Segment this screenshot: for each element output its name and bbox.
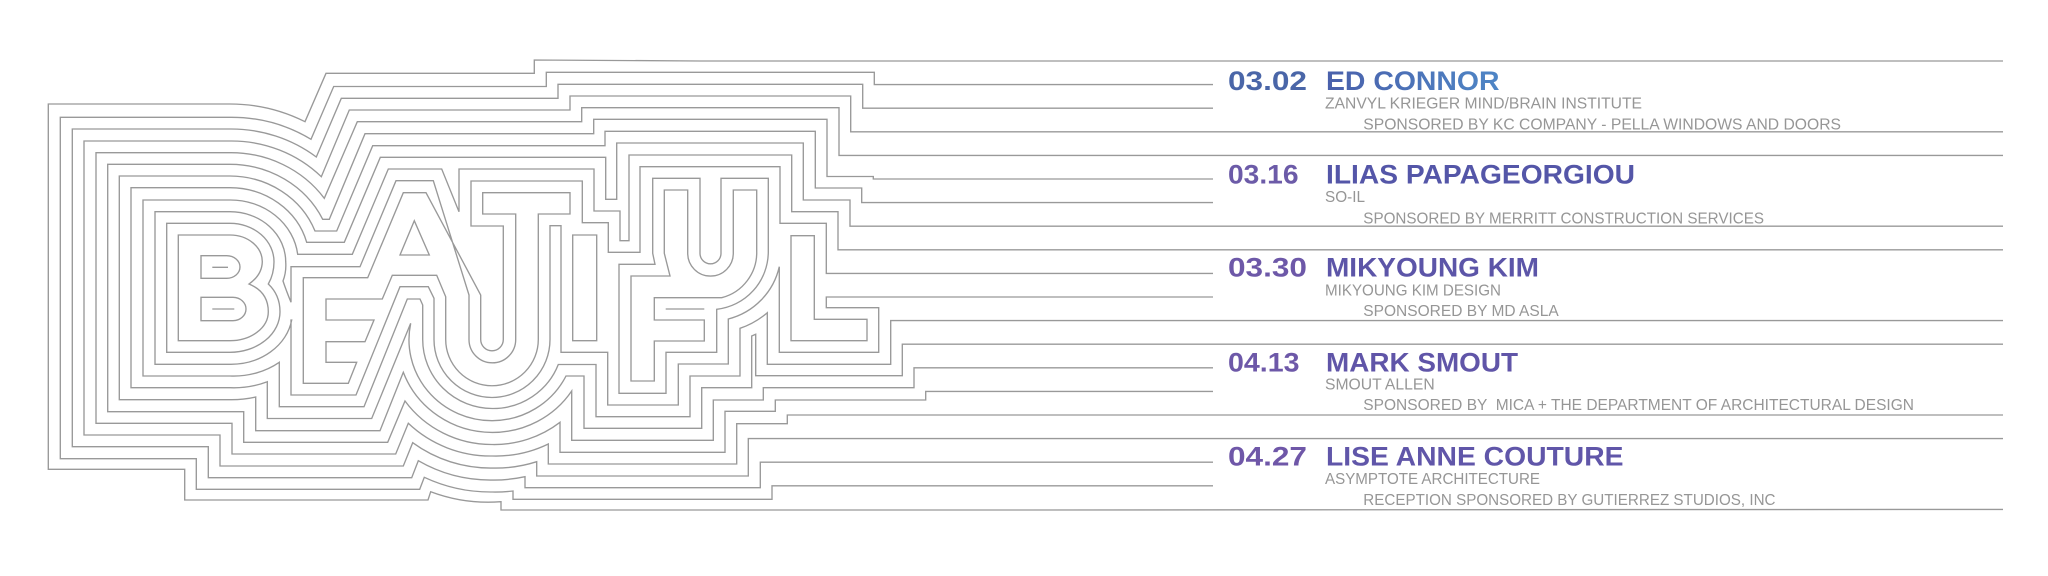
- upper U and F outline: [631, 190, 757, 381]
- date: 04.13: [1228, 347, 1300, 377]
- sponsor: RECEPTION SPONSORED BY GUTIERREZ STUDIOS, INC: [1363, 492, 1776, 509]
- affiliation: ZANVYL KRIEGER MIND/BRAIN INSTITUTE: [1325, 96, 1642, 113]
- contour ring 3: [72, 84, 1213, 488]
- sponsor: SPONSORED BY MERRITT CONSTRUCTION SERVICES: [1363, 210, 1764, 227]
- date: 04.27: [1228, 441, 1307, 471]
- affiliation: ASYMPTOTE ARCHITECTURE: [1325, 471, 1540, 488]
- speaker name: MARK SMOUT: [1326, 347, 1519, 377]
- letter I: [573, 235, 597, 341]
- date: 03.30: [1228, 253, 1307, 283]
- lecture 1: [1228, 66, 1841, 133]
- speaker name: MIKYOUNG KIM: [1326, 253, 1539, 283]
- speaker name: LISE ANNE COUTURE: [1326, 441, 1624, 471]
- lecture 5: [1228, 441, 1776, 509]
- lecture 2: [1228, 159, 1764, 227]
- contour ring 6: [108, 119, 1213, 452]
- contour ring 4: [84, 96, 2003, 476]
- contour ring 7: [119, 131, 1213, 440]
- sponsor: SPONSORED BY KC COMPANY - PELLA WINDOWS AND DOORS: [1363, 116, 1841, 133]
- letter B upper counter: [201, 256, 240, 278]
- lecture 4: [1228, 347, 1914, 414]
- affiliation: MIKYOUNG KIM DESIGN: [1325, 283, 1501, 300]
- A counter triangle: [400, 221, 429, 255]
- lecture 3: [1228, 253, 1559, 320]
- contour ring 1: [48, 60, 2003, 510]
- letter B lower counter: [201, 297, 246, 321]
- letter L: [791, 236, 867, 341]
- speaker name: ED CONNOR: [1326, 66, 1500, 96]
- speaker name: ILIAS PAPAGEORGIOU: [1326, 159, 1635, 189]
- maze lettering: BEAUTIFUL concentric contours: [48, 60, 2003, 510]
- letter B outer ring: [167, 223, 280, 352]
- contour ring 9: [143, 155, 2003, 417]
- affiliation: SO-IL: [1325, 189, 1365, 206]
- contour ring 10: letters E, A, lower U and T: [155, 167, 1213, 405]
- upper U and F outer ring: [619, 178, 768, 393]
- contour ring 8: [131, 143, 2003, 428]
- contour ring 5: [96, 108, 2003, 464]
- letter B outline: [178, 235, 268, 341]
- date: 03.02: [1228, 66, 1307, 96]
- contour ring 2: [60, 72, 1213, 499]
- date: 03.16: [1228, 159, 1298, 189]
- sponsor: SPONSORED BY MICA + THE DEPARTMENT OF ARCHITECTURAL DESIGN: [1363, 397, 1914, 414]
- sponsor: SPONSORED BY MD ASLA: [1363, 303, 1559, 320]
- affiliation: SMOUT ALLEN: [1325, 376, 1435, 393]
